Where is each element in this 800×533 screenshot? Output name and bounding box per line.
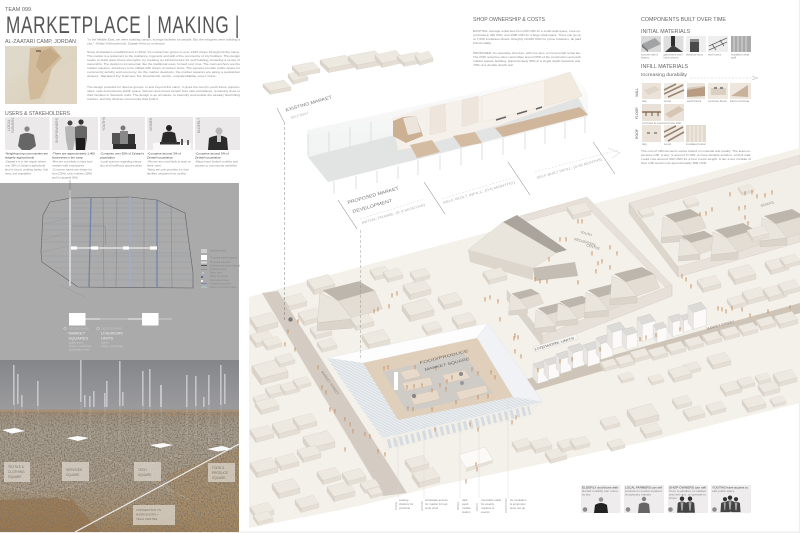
infill roof row: tarp	[642, 142, 647, 146]
label: market squares: public areas	[69, 340, 84, 344]
icon: group of youths	[112, 126, 136, 149]
panel: elderly: ELDERLY	[197, 117, 201, 133]
colonnade	[382, 402, 543, 451]
shop ownership text: proximately 400 USD, and 1000 USD for a large retail space. There can go up	[473, 33, 581, 37]
icon: two shop owners	[65, 119, 87, 150]
label: textile and clothing square: CLOTHING	[8, 470, 25, 474]
icon: elderly portrait	[594, 497, 608, 513]
label: tech square: TECH	[138, 468, 147, 472]
panel: local farmers: over 35% of Jordan's agricultural	[5, 164, 45, 168]
annotation: structure: STRUCTURE	[505, 498, 508, 513]
intro text block: street, flanked by frames for live/work units, expandable over time.	[87, 74, 217, 78]
shop ownership text: The 2015 rental fee rates could offset around 65% of the construction and each	[473, 55, 581, 59]
panel: local farmers: LOCAL	[7, 119, 11, 131]
icon: farmer	[18, 126, 36, 150]
callout: youths	[711, 485, 751, 513]
panel: local farmers: land is found, yielding barley, fruit	[5, 168, 48, 172]
components heading: COMPONENTS BUILT OVER TIME	[641, 17, 727, 23]
panel: youths	[100, 116, 145, 168]
callout: shop owners: shops	[669, 496, 677, 500]
panel: elderly	[195, 117, 240, 168]
barn	[503, 215, 567, 253]
panel: shopowners: and for apparel (9%)	[52, 176, 78, 180]
panel: youths: -Local opinions regarding educa-	[100, 160, 142, 164]
label: live/work units: LIVE/WORK	[101, 330, 124, 336]
panel: women: Za'atari's population	[147, 156, 173, 160]
annotation: wholesale: for market & food	[425, 502, 448, 506]
label: food and produce market square: MARKET SQUARE	[424, 357, 471, 372]
icon: elderly person	[208, 128, 228, 150]
pedestrian street	[262, 291, 407, 496]
annotation: water: mobile	[462, 506, 471, 510]
dashed link: existing market to site	[284, 122, 286, 320]
plan: camp outline with street grid	[41, 180, 193, 297]
roof: left	[327, 358, 398, 438]
callout: elderly: limited mobility can come	[582, 489, 618, 493]
label: youth recreation centre: RECREATION	[574, 237, 596, 247]
infill floor row: FLOOR	[635, 107, 639, 119]
users and stakeholders heading: USERS & STAKEHOLDERS	[5, 111, 70, 117]
initial materials thumbnails: steel trusses	[708, 52, 721, 56]
panel: youths: tion and livelihood opportunities	[100, 164, 143, 168]
panel: shopowners	[52, 117, 98, 180]
rooms	[392, 78, 583, 150]
panel: local farmers	[5, 117, 50, 176]
market street	[520, 303, 800, 392]
label: live/work units: SECOND PHASE	[102, 328, 122, 330]
existing market model	[263, 50, 433, 94]
intro text block: market squares, structures to be infilled with shops of various sizes. The squares provide public space for	[87, 66, 240, 70]
vertical annotation texts	[13, 360, 226, 446]
callout: shop owners	[668, 485, 708, 513]
title: MARKETPLACE | MAKING |	[6, 12, 240, 39]
shop ownership text: EXISTING: Average rental fees from 200 USD for a small retail space, once up-	[473, 29, 581, 33]
intro text block: city." -Killian Kleinschmidt, Zaatari field co-ordinator	[87, 42, 165, 46]
label: connection to workshops: WORKSHOPS +	[136, 512, 159, 516]
infill roof row: ROOF	[635, 129, 639, 139]
existing market label: EXISTING MARKET	[285, 94, 333, 112]
initial materials thumbnails: electrical room	[686, 52, 704, 56]
callout: youths: safe public space	[712, 489, 735, 493]
annotation: water: station	[462, 510, 471, 514]
location map of Jordan	[5, 46, 77, 104]
shop ownership text: to 7,000 Jordanian dinars. Roughly 10,000 USD for prime locations, all paid	[473, 37, 581, 41]
ground plane	[249, 148, 800, 528]
panel: elderly: -Comprise around 5% of	[195, 152, 229, 156]
annotation: water: dark	[462, 498, 468, 502]
panel: shopowners: -Common types are shops for	[52, 168, 92, 172]
annotation: water: sand,	[462, 502, 469, 506]
callout: youths: YOUTHS have access to	[712, 486, 748, 490]
initial materials thumbnails: concrete slab &	[641, 52, 658, 56]
shop ownership text: market square building, approximately 35% of a single depth live/work unit,	[473, 59, 581, 63]
annotation: wholesale: work units	[425, 506, 439, 510]
panel: elderly: -Many have limited mobility and	[195, 160, 238, 164]
label: live/work units: shops + workshops	[101, 344, 124, 348]
site marker circle	[288, 317, 293, 322]
section phase: self built infill 0-36 months: SELF BUILT INFILL: (0-36 MONTHS)	[536, 157, 603, 180]
photo texture	[0, 412, 239, 532]
intro text block: their families in live/work units. The design is an armature, to intensify and enable the already flourishing	[87, 93, 240, 97]
label: youth recreation centre: YOUTH	[580, 230, 593, 237]
annotation: shade: seating	[399, 498, 409, 502]
infill roof row: wood	[664, 142, 671, 146]
panel: camp master plan	[0, 180, 241, 360]
panel: shopowners: SHOPOWNERS	[55, 117, 59, 143]
label: live/work units: UNITS	[101, 336, 113, 340]
annotation: water: WATER	[457, 501, 460, 510]
section phase: proposed market development: INITIAL FRAME: (0-3 MONTHS)	[361, 203, 426, 225]
label: market squares: SQUARES	[68, 336, 88, 340]
callout: shop owners: SHOP OWNERS can sell	[669, 486, 706, 490]
white square markers	[2, 428, 233, 452]
section phase: self built infill 0-36 months	[508, 142, 620, 195]
section phase: proposed market development: PROPOSED MARKET	[347, 185, 400, 205]
annotations under the market square	[395, 400, 527, 514]
section phase: proposed market development: DEVELOPMENT	[352, 198, 393, 214]
legend: Proposed live/work	[210, 261, 231, 264]
annotation: space: events	[481, 510, 490, 514]
isometric site plan	[249, 148, 800, 528]
people	[284, 190, 791, 484]
label: connection to workshops: TECH CENTRE	[136, 517, 157, 521]
annotation: structure: shop set-up	[510, 506, 525, 510]
panel: elderly: access to community activities	[195, 164, 238, 168]
panel: shopowners: nesses with employees	[52, 164, 85, 168]
annotation: water	[457, 498, 471, 514]
surrounding buildings	[250, 254, 800, 526]
infill roof row	[635, 125, 706, 146]
existing market label: SELF BUILT	[290, 111, 309, 120]
panel: women: -Many are sole providers for their	[147, 168, 189, 172]
shop ownership text: informally.	[473, 41, 492, 45]
youth recreation centre compound	[468, 197, 672, 347]
label: food and produce square: SQUARE	[212, 476, 225, 480]
white pavilion	[458, 447, 493, 472]
callout: elderly: ELDERLY and those with	[582, 486, 618, 490]
infill materials heading: INFILL MATERIALS	[641, 64, 689, 70]
infill wall row: concrete block	[708, 99, 727, 103]
panel: shopowners: -There are approximately 1,400	[52, 152, 95, 156]
initial materials thumbnails: insulated metal	[731, 52, 749, 56]
intro text block: "In the Middle East, we were building camps, storage facilities for people. But the refugees were building a	[87, 38, 240, 42]
intro text block: The market is a testament to the resilience, ingenuity and skill of the community of city builders. This design	[87, 54, 240, 58]
intro text block: community activity and economy. As the market develops, the market squares are along a pedestrian	[87, 70, 240, 74]
label: market squares: SECOND PHASE	[69, 328, 89, 330]
label: textile and clothing square: SQUARE	[8, 475, 21, 479]
label: school: SCHOOL	[760, 200, 775, 208]
initial materials thumbnails: galvanized steel	[664, 52, 683, 56]
label: connection to workshops: CONNECTION TO	[136, 508, 162, 512]
callout: local farmers: products in market square's	[625, 489, 663, 493]
label: live/work units: LIVE/WORK UNITS	[534, 336, 576, 351]
label: market squares: shops + workshops	[69, 344, 92, 348]
legend: Proposed market squares	[210, 256, 238, 260]
annotation: wholesale	[421, 498, 448, 511]
initial materials thumbnails: beams	[641, 56, 650, 60]
label: youth recreation centre: CENTRE	[586, 243, 601, 251]
panel: youths: -Comprise over 55% of Za'atari's	[100, 152, 145, 156]
callout: shop owners: from a pavilion in market	[669, 489, 706, 493]
legend: Water and sewer	[210, 275, 228, 278]
shop ownership heading: SHOP OWNERSHIP & COSTS	[473, 17, 546, 23]
annotation: structure: & temporary	[510, 502, 526, 506]
panel: elderly: Za'atari's population	[195, 156, 221, 160]
market street label: MARKET STREET	[706, 320, 735, 331]
panel: shopowners: food (25%), civic markets (18%)	[52, 172, 92, 176]
annotation: space	[476, 498, 501, 514]
pedestrian market street label: MARKET STREET	[320, 370, 340, 396]
initial materials thumbnails	[641, 36, 751, 60]
label: market squares: MARKET	[68, 330, 86, 336]
existing market label	[277, 94, 333, 122]
initial materials thumbnails: block columns	[664, 56, 679, 60]
label: tech square: SQUARE	[138, 473, 151, 477]
annotation: shade: products	[399, 506, 411, 510]
infill wall row: tarp	[642, 99, 647, 103]
shop ownership text: 70% of a double depth unit	[473, 63, 513, 67]
infill wall row	[635, 83, 751, 103]
icon: woman at table	[153, 125, 191, 150]
intro text block	[87, 38, 240, 101]
panel: women: WOMEN	[149, 117, 153, 131]
annotation: shade: SHADE	[395, 501, 398, 510]
infill cost text: The cost of infill elements varies based on material and quality. The least ex-	[641, 149, 751, 153]
roof: right	[477, 323, 543, 402]
legend: Existing main street network	[210, 264, 241, 268]
white column	[394, 372, 398, 390]
label: textile and clothing square	[4, 462, 30, 482]
shop ownership text	[473, 29, 581, 67]
infill roof row: insulated metal	[686, 142, 706, 146]
callout: local farmers	[624, 485, 664, 513]
annotation: shade	[395, 498, 413, 510]
infill floor row: concrete & wood	[642, 121, 664, 125]
panel: women: -Women are most likely to work on	[147, 160, 191, 164]
panel: women	[147, 117, 193, 176]
annotation: wholesale: ACCESS	[421, 501, 424, 511]
legend: Existing streets	[210, 268, 227, 271]
roof: front	[382, 397, 543, 438]
floor	[308, 92, 588, 182]
label: market squares: community center	[69, 348, 90, 352]
label: live/work units	[533, 334, 578, 352]
panel: local farmers: -Zaatari's is in the region where	[5, 160, 46, 164]
diagram: square and unit module	[69, 313, 172, 326]
intro text block: market, and the diverse community that built it.	[87, 97, 159, 101]
annotation: structure: for insulation	[510, 498, 527, 502]
connection road	[75, 444, 239, 532]
infill wall row: WALL	[635, 88, 639, 97]
infill cost text	[641, 149, 751, 165]
market equipment	[459, 372, 463, 376]
callout: elderly: by bus	[582, 492, 591, 496]
panel: youths: population	[100, 156, 115, 160]
market stalls	[400, 368, 488, 405]
frame columns	[308, 115, 585, 194]
annotation: space: for weekly	[481, 502, 495, 506]
panel: shopowners: businesses in the camp	[52, 156, 83, 160]
legend: Recreational uses	[210, 279, 230, 282]
section phase: proposed market development	[338, 185, 426, 229]
section phase: self built infill 0-6 months	[424, 178, 515, 214]
icon: farmer portrait	[638, 497, 650, 513]
increasing durability scale	[641, 72, 758, 80]
intro text block: The design provides for diverse groups, in and beyond the camp. It gives the camp's youth future opportu-	[87, 85, 240, 89]
label: food and produce square: FOOD &	[212, 466, 225, 470]
legend: Existing market	[210, 250, 227, 252]
panel: women: families, widowed from conflict	[147, 172, 186, 176]
callout: local farmers: temporary stands	[625, 492, 652, 496]
infill cost text: could cost around 330 USD for a four metre length. A tier a tier module of	[641, 157, 751, 161]
annotation: space: moveable stalls	[481, 498, 501, 502]
panel: local farmers: FARMERS	[11, 118, 15, 133]
infill wall row: wood	[664, 99, 671, 103]
infill floor row	[635, 104, 684, 125]
legend: Water point	[210, 272, 222, 274]
wood roofs	[410, 140, 440, 158]
shop ownership text: PROPOSED: Co-operative structure, with one-time or incremental rental fee.	[473, 51, 581, 55]
panel: aerial camp photo	[0, 360, 239, 532]
panel: local farmers: trees, and vegetables	[5, 172, 32, 176]
label: food and produce market square: FOOD/PRODUCE	[419, 349, 469, 365]
icon: youths portrait	[720, 495, 741, 512]
panel: women: their own	[147, 164, 161, 168]
legend: Future connection routes	[210, 286, 237, 289]
back plane	[307, 72, 588, 182]
increasing durability scale: Increasing durability	[641, 72, 688, 78]
label: tech square	[134, 462, 161, 481]
infill wall row: earth block	[687, 99, 702, 103]
annotation: space: SPACE	[476, 503, 479, 511]
intro text block: Since Al-Zaatari's establishment in 2012, it's market has grown to over 1400 shops throughout the camp.	[87, 50, 240, 54]
infill cost text: pensive infill, a tarp, is around 6 USD. A more durable solution, a brick wall,	[641, 153, 751, 157]
location heading: AL-ZAATARI CAMP, JORDAN	[5, 39, 76, 45]
label: textile and clothing square: TEXTILE &	[8, 465, 25, 469]
courtyard	[363, 338, 513, 420]
label: live/work units: homes	[101, 340, 109, 344]
label: food and produce square: PRODUCE	[212, 471, 228, 475]
roof: top	[327, 323, 488, 363]
dashed link: section to market square	[360, 230, 362, 360]
legend	[201, 249, 241, 289]
annotation: space: markets &	[481, 506, 494, 510]
panel: youths: YOUTHS	[102, 116, 106, 131]
label: food and produce square	[208, 463, 235, 482]
annotation: structure	[505, 498, 527, 513]
intro text block: ownership. The design is incremental, like the traditional souq, formed over time. The main anchors are the	[87, 62, 240, 66]
label: connection to workshops	[133, 505, 175, 525]
callout: elderly	[581, 485, 620, 513]
label: services square: SQUARE	[66, 473, 79, 477]
label: market squares	[64, 327, 92, 352]
panel: women: -Comprise around 3/4 of	[147, 152, 181, 156]
initial materials thumbnails: wall	[731, 56, 736, 60]
panel: shopowners: -Men are most likely to have busi-	[52, 160, 93, 164]
infill cost text: floor infill would cost approximately 800 USD.	[641, 161, 707, 165]
section phase: self built infill 0-6 months: SELF BUILT INFILL: (0-6 MONTHS)	[442, 180, 515, 205]
initial materials heading: INITIAL MATERIALS	[641, 29, 691, 35]
annotation: wholesale: wholesale access	[425, 498, 448, 502]
panel: local farmers: -Neighbouring communities are	[5, 152, 48, 156]
panel: local farmers: largely agricultural	[5, 156, 34, 160]
proposed market section model	[307, 72, 588, 194]
callout: local farmers: LOCAL FARMERS can sell	[625, 486, 662, 490]
label: live/work units	[97, 327, 124, 348]
label: services square	[62, 462, 89, 481]
school compound	[629, 155, 800, 277]
market square	[327, 323, 543, 451]
label: services square: SERVICES	[66, 468, 82, 472]
annotation: shade: shelters for	[399, 502, 413, 506]
tan wall	[393, 116, 423, 143]
intro text block: seeks to build upon these strengths, by creating an infrastructure for self building, fostering a sense of	[87, 58, 240, 62]
intro text block: nities, safe and inclusive public space. Women and minors benefit from safe workplaces, remaining close to	[87, 89, 240, 93]
callout: shop owners: and set-ups, or operate in	[669, 492, 706, 496]
icon: shop owners portrait	[677, 496, 695, 513]
team label: TEAM 099	[5, 7, 31, 13]
infill floor row: concrete slab	[664, 121, 682, 125]
infill wall row: barrel concrete	[730, 99, 750, 103]
legend: Proposed extension	[210, 282, 232, 286]
label: youth recreation centre	[574, 230, 601, 251]
live/work units	[533, 302, 706, 384]
label: food and produce market square	[419, 349, 471, 372]
